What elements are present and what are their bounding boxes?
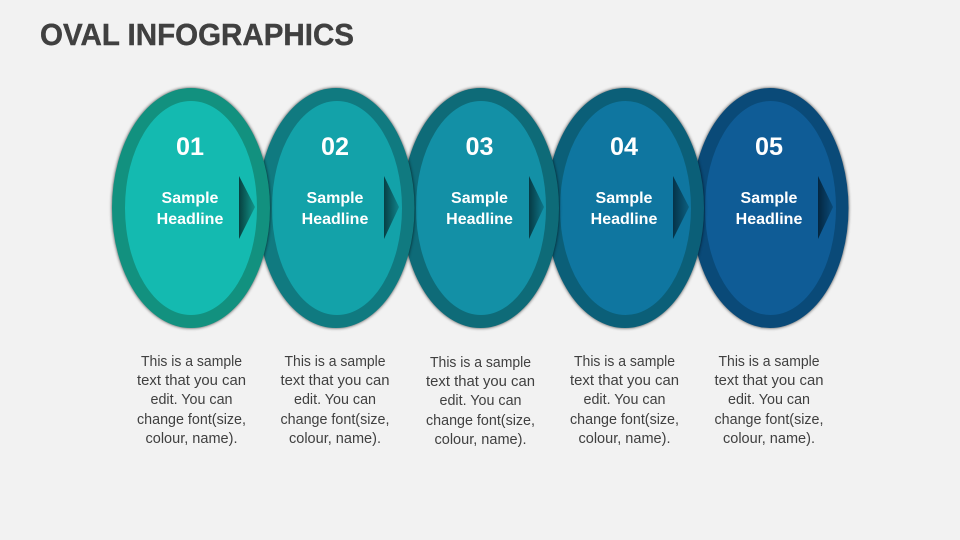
body text 05: edit. You can <box>728 392 810 408</box>
headline 04: Headline <box>591 211 657 228</box>
number 03: 03 <box>466 133 494 161</box>
body text 01: change font(size, <box>137 412 246 428</box>
number 02: 02 <box>321 133 349 161</box>
number 04: 04 <box>610 133 638 161</box>
arrow 04 <box>673 176 689 239</box>
oval 03 <box>402 88 559 328</box>
body text 02: colour, name). <box>289 431 381 447</box>
oval 02 <box>258 88 414 328</box>
headline 05: Sample <box>741 190 798 207</box>
body text 05 <box>714 354 824 447</box>
headline 03: Headline <box>446 211 513 228</box>
headline 01: Headline <box>157 211 223 228</box>
headline 02: Headline <box>302 211 368 228</box>
body text 02: change font(size, <box>280 412 390 428</box>
body text 04: change font(size, <box>570 412 679 428</box>
oval 01 <box>112 88 270 328</box>
body text 03: text that you can <box>426 374 535 390</box>
body text 04: text that you can <box>570 373 679 389</box>
body text 01: colour, name). <box>146 431 238 447</box>
body text 02: edit. You can <box>294 392 376 408</box>
headline 03: Sample <box>451 190 508 207</box>
body text 01 <box>137 354 246 447</box>
oval 04 <box>546 88 704 328</box>
number 01: 01 <box>176 133 204 161</box>
body text 03: edit. You can <box>440 393 522 409</box>
body text 05: This is a sample <box>718 354 820 370</box>
body text 01: edit. You can <box>150 392 232 408</box>
body text 04: colour, name). <box>578 431 670 447</box>
number 05: 05 <box>755 133 783 161</box>
title: OVAL INFOGRAPHICS <box>40 17 354 52</box>
body text 01: This is a sample <box>141 354 242 370</box>
headline 04: Sample <box>596 190 653 207</box>
body text 02 <box>280 354 390 447</box>
body text 05: text that you can <box>714 373 824 389</box>
body text 05: colour, name). <box>723 431 815 447</box>
body text 03: This is a sample <box>430 355 531 371</box>
body text 04: This is a sample <box>574 354 675 370</box>
body text 04 <box>570 354 679 447</box>
arrow 05 <box>818 176 833 239</box>
body text 03: change font(size, <box>426 413 535 429</box>
headline 02: Sample <box>307 190 364 207</box>
headline 01: Sample <box>162 190 219 207</box>
body text 01: text that you can <box>137 373 246 389</box>
body text 02: text that you can <box>280 373 390 389</box>
body text 03: colour, name). <box>434 432 526 448</box>
oval 05 <box>692 88 848 328</box>
body text 02: This is a sample <box>284 354 386 370</box>
body text 05: change font(size, <box>714 412 824 428</box>
headline 05: Headline <box>736 211 802 228</box>
arrow 02 <box>384 176 399 239</box>
arrow 01 <box>239 176 255 239</box>
arrow 03 <box>529 176 544 239</box>
body text 03 <box>426 355 535 448</box>
body text 04: edit. You can <box>584 392 666 408</box>
